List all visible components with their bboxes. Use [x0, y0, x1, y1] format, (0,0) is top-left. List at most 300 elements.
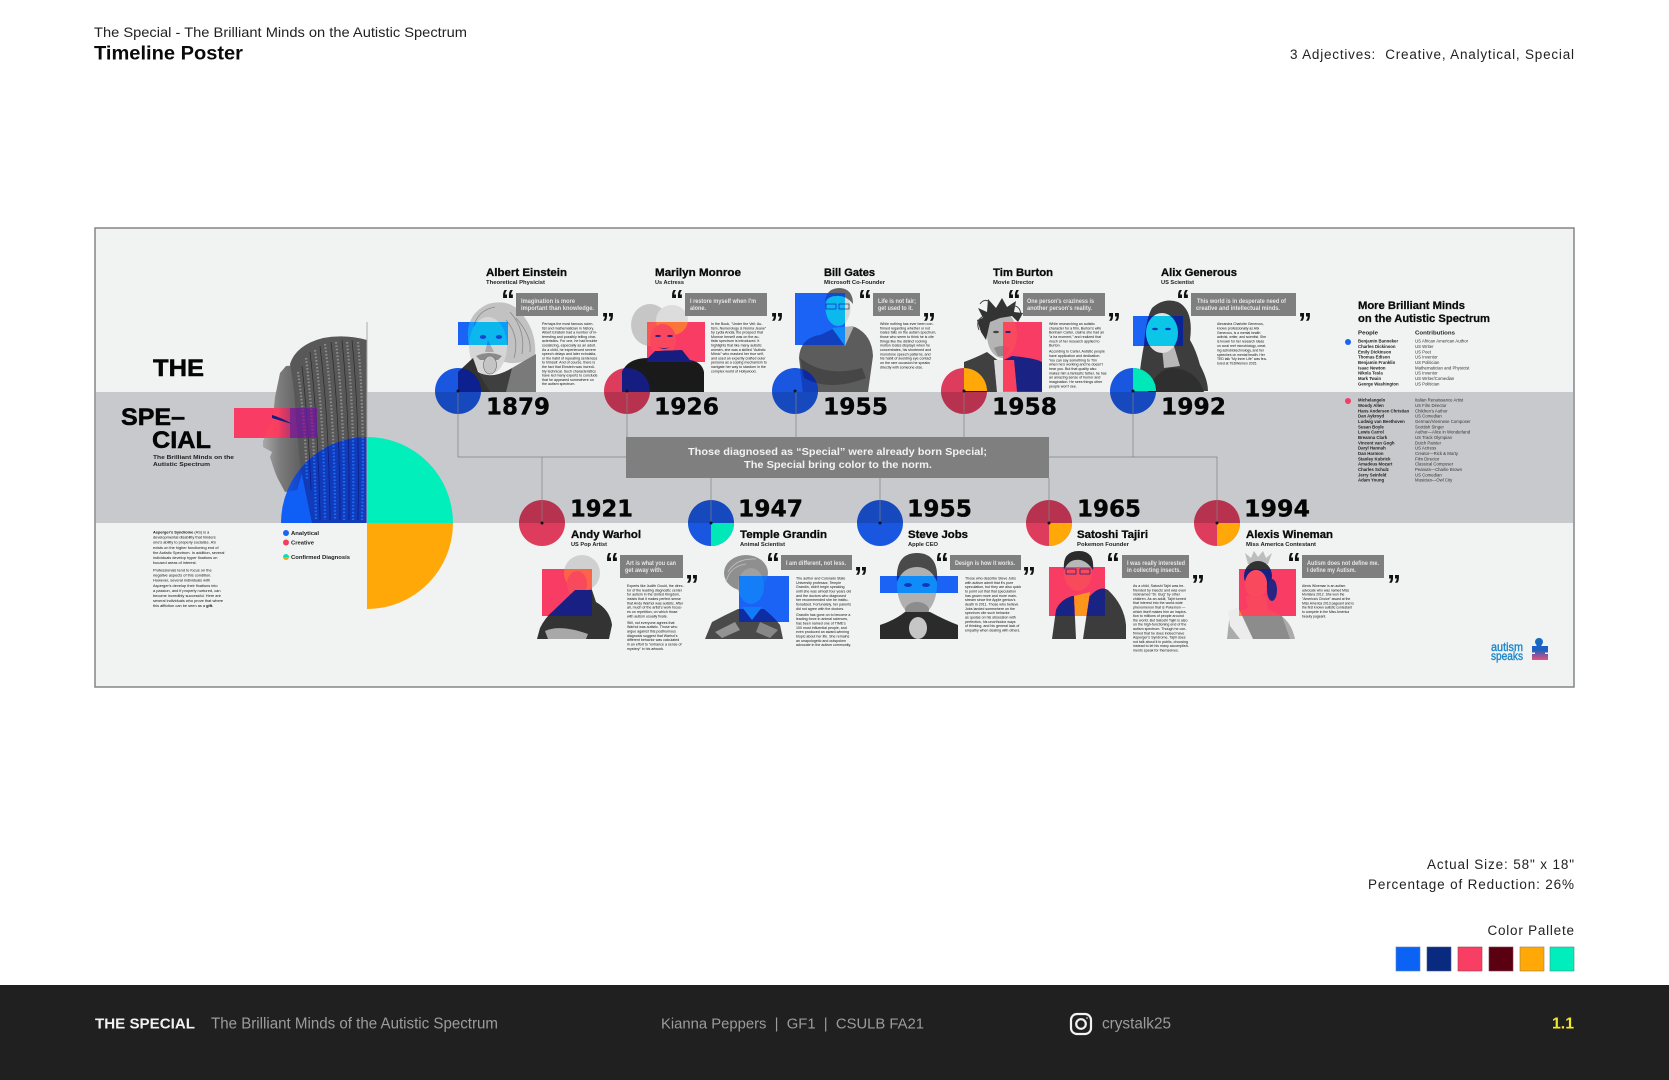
biography: Gates: concentrates, his shortened and — [880, 348, 931, 352]
biography: Warhol: argue against this posthumous — [627, 630, 676, 634]
biography: Jobs: with autism admit that it's pure — [965, 581, 1013, 585]
photo: Tim Burton — [964, 298, 1042, 392]
biography: Tajiri: nicknamed "Dr. Bug" by other — [1133, 593, 1181, 597]
text block: Asperger's syndrome: exists on the higher functioning end of — [153, 545, 219, 550]
text block: Asperger's syndrome: several individuals who prove that where — [153, 598, 223, 603]
biography: Einstein: bly technical. Such characteristics — [542, 369, 596, 373]
spec: size and reduction: Percentage of Reduction: 26% — [1368, 877, 1574, 892]
biography: Monroe: Monroe herself was on the au- — [711, 335, 760, 339]
biography: Monroe: complex world of Hollywood. — [711, 369, 757, 373]
analytical list: George Washington — [1358, 381, 1399, 386]
name: Alix Generous: Alix Generous — [1161, 267, 1237, 279]
creative list: Vincent van Gogh — [1358, 440, 1395, 445]
text block: Asperger's syndrome: developmental disability that hinders — [153, 535, 216, 540]
quote: Gates: Life is not fair; — [878, 298, 916, 305]
year node: creative, confirmed diagnosis — [1194, 500, 1240, 546]
biography: Tajiri: tion to millions of people around — [1133, 614, 1184, 618]
role: Theoretical Physicist: Theoretical Physicist — [486, 280, 545, 286]
name: Alexis Wineman: Alexis Wineman — [1246, 529, 1333, 541]
person: Albert Einstein — [435, 267, 615, 420]
biography: Grandin: tionalized. Fortunately, her parents — [796, 602, 851, 606]
page header: project title: Timeline Poster — [94, 42, 243, 64]
hero: portrait and quarter-circle pie — [234, 322, 453, 609]
biography: Gates: on the rare occasion he speaks — [880, 361, 930, 365]
text block: Asperger's syndrome: one's ability to properly socialize. AS — [153, 540, 216, 545]
name: Tim Burton: Tim Burton — [993, 267, 1053, 279]
year node: creative, confirmed diagnosis — [1026, 500, 1072, 546]
biography: Grandin: leading force in animal sciences, — [796, 617, 848, 621]
analytical list: US African American Author — [1415, 339, 1469, 344]
creative list: US Actress — [1415, 446, 1436, 451]
analytical list: Mathematician and Physicist — [1415, 365, 1470, 370]
biography: Burton: Burton. — [1049, 344, 1061, 348]
text block: Asperger's syndrome: focused areas of interest. — [153, 560, 197, 565]
person: Andy Warhol — [519, 494, 699, 651]
quote: Generous: creative and intellectual minds. — [1196, 305, 1280, 312]
role: Pokemon Founder: Pokemon Founder — [1077, 542, 1129, 548]
year node: analytical, confirmed diagnosis — [1110, 368, 1156, 414]
creative list: Michelangelo — [1358, 398, 1386, 403]
biography: Jobs: has grown more and more main- — [965, 594, 1018, 598]
biography: Tajiri: autism spectrum. Though he con- — [1133, 627, 1187, 631]
quote: Jobs: “ — [935, 547, 949, 578]
quote: Warhol: “ — [605, 547, 619, 578]
biography: Jobs: empathy when dealing with others. — [965, 628, 1020, 632]
creative list: Classical Composer — [1415, 462, 1454, 467]
year node: analytical, confirmed diagnosis — [688, 500, 734, 546]
text block: Asperger's syndrome: become incredibly successful. Here are — [153, 593, 221, 598]
creative list: Dan Harmon — [1358, 451, 1384, 456]
biography: Burton: character for a film, Burton's wife — [1049, 326, 1101, 330]
biography: Warhol: that Andy Warhol was autistic. After — [627, 601, 684, 605]
creative list: Scottish Singer — [1415, 424, 1444, 429]
name: Steve Jobs: Steve Jobs — [908, 529, 968, 541]
biography: Grandin: even produced an award-winning — [796, 630, 849, 634]
year node: analytical — [857, 500, 903, 546]
biography: Gates: motion Gates displays when he — [880, 344, 930, 348]
colour block: blue square — [739, 576, 789, 622]
panel: more brilliant minds — [1345, 300, 1490, 483]
column heads: People — [1358, 330, 1378, 336]
pie: orange quarter — [367, 523, 453, 609]
biography: Einstein: tist and mathematician in history, — [542, 326, 594, 330]
colour block: pink square — [1049, 567, 1105, 616]
spec: size and reduction — [1368, 857, 1574, 892]
photo: Albert Einstein — [458, 302, 536, 392]
biography: Einstein: the fact that Einstein was incredi- — [542, 365, 596, 369]
quote: Einstein: Imagination is more — [521, 298, 576, 305]
biography: Tajiri: on the high-functioning end of the — [1133, 623, 1186, 627]
central callout — [626, 437, 1049, 478]
analytical list: Nikola Tesla — [1358, 371, 1383, 376]
quote: Monroe: alone. — [690, 305, 706, 312]
colour palette: Color Pallete — [1488, 923, 1574, 938]
footer: credits: Kianna Peppers | GF1 | CSULB FA21 — [661, 1016, 924, 1032]
biography: Gates: things like the distinct rocking — [880, 339, 927, 343]
role: US Pop Artist: US Pop Artist — [571, 542, 607, 548]
photo: Andy Warhol — [537, 555, 612, 639]
photo: Bill Gates — [799, 288, 873, 392]
biography: Warhol: tor of the leading diagnostic center — [627, 588, 683, 592]
biography: Grandin: and the doctors who diagnosed — [796, 594, 846, 598]
year node: analytical — [772, 368, 818, 414]
biography: Wineman: Miss America 2013 pageant and is — [1302, 601, 1354, 605]
biography: Burton: people won't see. — [1049, 384, 1077, 388]
biography: Generous: activist, writer, and scientist. She — [1217, 335, 1266, 339]
year 1992: 1992 — [1161, 392, 1226, 420]
biography: Warhol: in an effort to "enhance a sense of — [627, 643, 682, 647]
creative list: Children's Author — [1415, 408, 1448, 413]
biography: Jobs: Jobs landed somewhere on the — [965, 607, 1015, 611]
biography: Jobs: of thinking, and his general lack of — [965, 624, 1019, 628]
biography: Warhol: Still, not everyone agrees that — [627, 621, 675, 625]
biography: Burton: much of her research applied to — [1049, 339, 1100, 343]
biography: Tajiri: As a child, Satoshi Tajiri was be- — [1133, 584, 1185, 588]
biography: Monroe: and used an expertly crafted outer — [711, 356, 766, 360]
quote: Wineman: Autism does not define me. — [1307, 560, 1379, 567]
biography: Generous: on coral reef microbiology, creat- — [1217, 344, 1266, 348]
quote: Einstein: “ — [501, 284, 515, 315]
biography: Grandin: did not agree with the doctors. — [796, 607, 844, 611]
biography: Einstein: speech delays and later echolalia, — [542, 352, 596, 356]
text block: Asperger's syndrome — [153, 530, 225, 608]
analytical list: US Inventor — [1415, 355, 1438, 360]
quote: Grandin: I am different, not less. — [786, 560, 846, 567]
biography: Burton: Bonham Carter, claims she had an — [1049, 331, 1104, 335]
creative list: Amadeus Mozart — [1358, 462, 1393, 467]
quote: Wineman — [1287, 547, 1401, 600]
biography: Jobs: Those who describe Steve Jobs — [965, 576, 1016, 580]
biography: Monroe: tistic spectrum is introduced. It — [711, 339, 759, 343]
creative list: Lewis Carrol — [1358, 430, 1384, 435]
biography: Einstein: that he appeared somewhere on — [542, 378, 594, 382]
biography: Gates: firmed regarding whether or not — [880, 326, 930, 330]
biography: Warhol: different behavior was calculated — [627, 638, 679, 642]
person: Temple Grandin — [688, 494, 868, 647]
quote: Monroe — [670, 284, 784, 338]
colour block: pink half face — [1003, 322, 1042, 391]
quote: Einstein — [501, 284, 615, 338]
legend — [283, 530, 350, 561]
biography: Jobs: speculation, but they are also quick — [965, 585, 1021, 589]
text block: Asperger's syndrome: a passion, and if properly nurtured, can — [153, 588, 220, 593]
biography: Wineman: advocate who was named Miss — [1302, 588, 1349, 592]
creative list: Adam Young — [1358, 478, 1384, 483]
biography: Grandin: biopic about her life. She remains — [796, 634, 850, 638]
biography: Warhol: diagnosis suggest that Warhol's — [627, 634, 678, 638]
creative list: Italian Renaissance Artist — [1415, 398, 1464, 403]
role: Movie Director: Movie Director — [993, 280, 1034, 286]
biography: Monroe: In the Book, "Under the Veil: Au- — [711, 322, 763, 326]
biography: Einstein: the autism spectrum. — [542, 382, 575, 386]
footer: handle: crystalk25 — [1102, 1016, 1171, 1032]
analytical list: Isaac Newton — [1358, 365, 1386, 370]
biography: Tajiri: firmed that he does indeed have — [1133, 631, 1184, 635]
person: Alexis Wineman — [1194, 494, 1401, 639]
quote: Warhol: Art is what you can — [626, 560, 676, 567]
column heads: Contributions — [1415, 330, 1455, 336]
quote: Warhol — [605, 547, 699, 600]
role: US Scientist: US Scientist — [1161, 280, 1194, 286]
year node: analytical — [435, 368, 481, 414]
photo: Alexis Wineman — [1227, 551, 1295, 639]
biography: Einstein: Albert Einstein had a number of in- — [542, 331, 598, 335]
poster title — [121, 355, 234, 468]
quote: Warhol: get away with. — [625, 567, 663, 574]
pie: teal quarter — [367, 437, 453, 523]
quote: Jobs: ” — [1022, 561, 1036, 592]
analytical list: US Poet — [1415, 349, 1432, 354]
person: Tim Burton — [941, 267, 1121, 420]
colour block: pink square — [542, 569, 592, 616]
biography: Burton: when he's working and he doesn't — [1049, 363, 1103, 367]
biography: Burton: "a ha moment," and realized that — [1049, 335, 1101, 339]
quote: Burton: another person's reality. — [1027, 305, 1092, 312]
biography: Generous: TED talk "My Inner Life" was fea- — [1217, 357, 1267, 361]
analytical list: Charles Dickinson — [1358, 344, 1396, 349]
biography: Wineman: Alexis Wineman is an autism — [1302, 584, 1346, 588]
quote: Monroe: ” — [770, 307, 784, 338]
central callout: Those diagnosed as “Special” were already born Special; — [688, 447, 987, 458]
biography: Monroe: women, she was a skilled "Autistic — [711, 348, 766, 352]
year 1879: 1879 — [486, 392, 550, 420]
photo: Satoshi Tajiri — [1052, 551, 1126, 639]
biography: Warhol: for autism in the United Kingdom, — [627, 593, 680, 597]
grey timeline band — [96, 392, 1573, 523]
person: Alix Generous — [1110, 267, 1312, 420]
text block: Asperger's syndrome: negative aspects of this condition. — [153, 573, 211, 578]
year node: creative — [604, 368, 650, 414]
biography: Grandin: Grandin has gone on to become a — [796, 613, 850, 617]
year 1965: 1965 — [1077, 494, 1141, 522]
heading: More Brilliant Minds — [1358, 300, 1465, 312]
quote: Tajiri — [1106, 547, 1205, 600]
biography: Generous: speeches on mental health. Her — [1217, 353, 1266, 357]
icon: instagram — [1071, 1014, 1091, 1034]
creative list: Dan Aykroyd — [1358, 414, 1385, 419]
creative list: Dutch Painter — [1415, 440, 1442, 445]
biography: Gates: monotone speech patterns, and — [880, 352, 931, 356]
person: Satoshi Tajiri — [1026, 494, 1205, 652]
text block: Asperger's syndrome: Asperger's Syndrome (AS) is a — [153, 530, 210, 534]
name: Albert Einstein: Albert Einstein — [486, 267, 567, 279]
poster title: SPE– — [121, 404, 185, 431]
year 1955: 1955 — [907, 494, 972, 522]
creative list: Peanuts—Charlie Brown — [1415, 467, 1463, 472]
biography: Monroe: persona as a coping mechanism to — [711, 361, 767, 365]
creative list: US Track Olympian — [1415, 435, 1453, 440]
quote: Einstein: ” — [601, 307, 615, 338]
creative list: Ludwig van Beethoven — [1358, 419, 1405, 424]
analytical list: US Writer — [1415, 344, 1434, 349]
creative list: Hans Andersen Christian — [1358, 408, 1410, 413]
biography: Jobs: to point out that that speculation — [965, 589, 1016, 593]
logo: autism speaks — [1491, 638, 1548, 663]
portrait in profile with braids — [263, 336, 367, 523]
biography: Wineman: "America's Choice" award at the — [1302, 597, 1350, 601]
text block: Asperger's syndrome: Professionals tend to focus on the — [153, 568, 212, 572]
biography: Burton: According to Carter, Autistic people — [1049, 350, 1105, 354]
quote: Generous: ” — [1298, 307, 1312, 338]
quote: Wineman: I define my Autism. — [1307, 567, 1356, 574]
logo: autism speaks: autism — [1491, 640, 1523, 654]
creative list: US Comedian — [1415, 472, 1442, 477]
quote: Burton: “ — [1007, 284, 1021, 315]
text block: Asperger's syndrome: Asperger's develop their fixations into — [153, 583, 218, 588]
quote: Wineman: ” — [1387, 569, 1401, 600]
quote: Tajiri: in collecting insects. — [1127, 567, 1181, 574]
footer: subtitle: The Brilliant Minds of the Autistic Spectrum — [211, 1016, 498, 1032]
creative list: Charles Schulz — [1358, 467, 1389, 472]
poster background — [95, 228, 1574, 687]
biography: Grandin: until she was almost four years old — [796, 589, 851, 593]
year 1958: 1958 — [992, 392, 1057, 420]
logo: autism speaks: speaks — [1491, 649, 1523, 663]
creative list: Creator—Rick & Morty — [1415, 451, 1459, 456]
footer: project name: THE SPECIAL — [95, 1016, 195, 1032]
quote: Gates — [858, 284, 936, 338]
hero axis line — [366, 322, 368, 523]
page header: project title: The Special - The Brilliant Minds on the Autistic Spectrum — [94, 24, 467, 40]
poster panel — [95, 228, 1574, 687]
biography: Warhol: all, much of the artist's work focus- — [627, 606, 683, 610]
legend: Confirmed Diagnosis — [291, 555, 350, 561]
creative list: US Film Director — [1415, 403, 1447, 408]
quote: Jobs — [935, 547, 1036, 592]
creative list — [1345, 398, 1471, 483]
biography: Gates: his habit of avoiding eye contact — [880, 357, 931, 361]
name: Marilyn Monroe: Marilyn Monroe — [655, 267, 741, 279]
creative list: Daryl Hannah — [1358, 446, 1386, 451]
biography: Wineman: the first known autistic contestant — [1302, 606, 1352, 610]
colour palette — [1396, 923, 1574, 971]
biography: Monroe: Mimic" who masked her true self, — [711, 352, 764, 356]
analytical list: US Writer/Comedian — [1415, 376, 1455, 381]
analytical list: Emily Dickinson — [1358, 349, 1392, 354]
year 1955: 1955 — [823, 392, 888, 420]
poster title: Autistic Spectrum — [153, 462, 210, 468]
analytical list: Benjamin Franklin — [1358, 360, 1396, 365]
quote: Monroe: “ — [670, 284, 684, 315]
creative list: Author—Alice in Wonderland — [1415, 430, 1471, 435]
quote: Gates: get used to it. — [878, 305, 913, 312]
pink eye band — [234, 408, 317, 438]
name: Temple Grandin: Temple Grandin — [740, 529, 827, 541]
creative list: Jerry Seinfeld — [1358, 472, 1387, 477]
colour block: blue over eyes — [1133, 316, 1183, 346]
biography: Generous: Alexandra Charlotte Generous, — [1217, 322, 1264, 326]
analytical list: Mark Twain — [1358, 376, 1381, 381]
biography: Jobs: as quotas on his obsession with — [965, 615, 1016, 619]
quote: Warhol: ” — [685, 569, 699, 600]
biography: Tajiri: ments speak for themselves. — [1133, 648, 1179, 652]
creative list: Film Director — [1415, 456, 1440, 461]
quote: Wineman: “ — [1287, 547, 1301, 578]
creative list: Susan Boyle — [1358, 424, 1384, 429]
colour block: pink over face — [647, 322, 705, 362]
biography: Jobs: perfection, his unorthodox ways — [965, 620, 1016, 624]
biography: Grandin: advocate in the autism community. — [796, 643, 851, 647]
quote: Grandin — [766, 547, 868, 592]
biography: Tajiri: Asperger's Syndrome, Tajiri does — [1133, 636, 1186, 640]
role: Apple CEO: Apple CEO — [908, 542, 938, 548]
biography: Grandin: University professor, Temple — [796, 581, 841, 585]
analytical list: Thomas Edison — [1358, 355, 1390, 360]
biography: Gates: Gates falls on the autism spectrum, — [880, 331, 936, 335]
biography: Generous: known professionally as Alix — [1217, 326, 1260, 330]
biography: Wineman: Montana 2012. She won the — [1302, 593, 1345, 597]
central callout: The Special bring color to the norm. — [744, 460, 932, 471]
biography: Jobs: spectrum cite such behavior — [965, 611, 1011, 615]
biography: Gates: While nothing has ever been con- — [880, 322, 934, 326]
quote: Jobs: Design is how it works. — [955, 560, 1015, 567]
biography: Burton: imagination. He sees things other — [1049, 380, 1103, 384]
header: three adjectives: 3 Adjectives: Creative, Analytical, Special — [1290, 47, 1574, 62]
quote: Tajiri: I was really interested — [1127, 560, 1185, 567]
colour block: pink square — [1239, 569, 1296, 616]
footer bar — [0, 985, 1669, 1080]
biography: Warhol: es on repetition, on which those — [627, 610, 678, 614]
pie: blue quarter over hair — [281, 437, 366, 523]
biography: Monroe: by Lydia Andal, the prospect that — [711, 331, 763, 335]
biography: Grandin: has been named one of TIME's — [796, 621, 846, 625]
biography: Wineman: to compete in the Miss America — [1302, 610, 1349, 614]
biography: Burton: an amazing sense of humor and — [1049, 376, 1100, 380]
legend: Analytical — [291, 531, 320, 537]
year node: creative, confirmed diagnosis — [941, 368, 987, 414]
biography: Tajiri: children. As an adult, Tajiri turned — [1133, 597, 1186, 601]
quote: Burton: ” — [1107, 307, 1121, 338]
biography: Grandin: her recommended she be institu- — [796, 598, 849, 602]
biography: Einstein: acteristics. For one, he had trouble — [542, 339, 597, 343]
role: Microsoft Co-Founder: Microsoft Co-Founder — [824, 280, 885, 286]
name: Bill Gates: Bill Gates — [824, 267, 875, 279]
biography: Monroe: navigate her way to stardom in the — [711, 365, 766, 369]
quote: Generous — [1176, 284, 1312, 338]
heading — [1358, 300, 1490, 325]
quote: Monroe: I restore myself when I'm — [690, 298, 756, 305]
quote: Generous: This world is in desperate need of — [1197, 298, 1287, 305]
poster title: The Brilliant Minds on the — [153, 455, 234, 461]
biography: Jobs: stream since the Apple genius's — [965, 598, 1016, 602]
quote: Gates: “ — [858, 284, 872, 315]
biography: Tajiri: instead to let his many accomplish- — [1133, 644, 1190, 648]
colour block: blue over eyes — [458, 322, 508, 345]
biography: Warhol: Experts like Judith Gould, the direc- — [627, 584, 685, 588]
biography: Generous: tured at TEDWomen 2015. — [1217, 362, 1257, 366]
year node: creative — [519, 500, 565, 546]
column heads — [1358, 330, 1455, 336]
biography: Einstein: teresting and possibly telling char- — [542, 335, 597, 339]
biography: Jobs: death in 2011. Those who believe — [965, 602, 1018, 606]
biography: Tajiri: the world. But Satoshi Tajiri is also — [1133, 618, 1187, 622]
text block: Asperger's syndrome: this affliction can be seen as a gift. — [153, 603, 213, 608]
biography: Gates: directly with someone else. — [880, 365, 923, 369]
spec: size and reduction: Actual Size: 58" x 18" — [1427, 857, 1574, 872]
biography: Grandin: Grandin, didn't begin speaking — [796, 585, 844, 589]
analytical list: US Politician — [1415, 381, 1440, 386]
biography: Grandin: 100 most influential people, and — [796, 626, 847, 630]
heading: on the Autistic Spectrum — [1358, 313, 1490, 325]
biography: Monroe: tism, Numerology & Norma Jeane" — [711, 326, 767, 330]
photo: Marilyn Monroe — [622, 304, 704, 392]
analytical list: US Inventor — [1415, 371, 1438, 376]
biography: Tajiri: not talk about it in public, choosing — [1133, 640, 1188, 644]
role: Us Actress: Us Actress — [655, 280, 684, 286]
biography: Monroe: highlights that like many autistic — [711, 344, 762, 348]
analytical list: Benjamin Banneker — [1358, 339, 1398, 344]
year 1926: 1926 — [654, 392, 719, 420]
